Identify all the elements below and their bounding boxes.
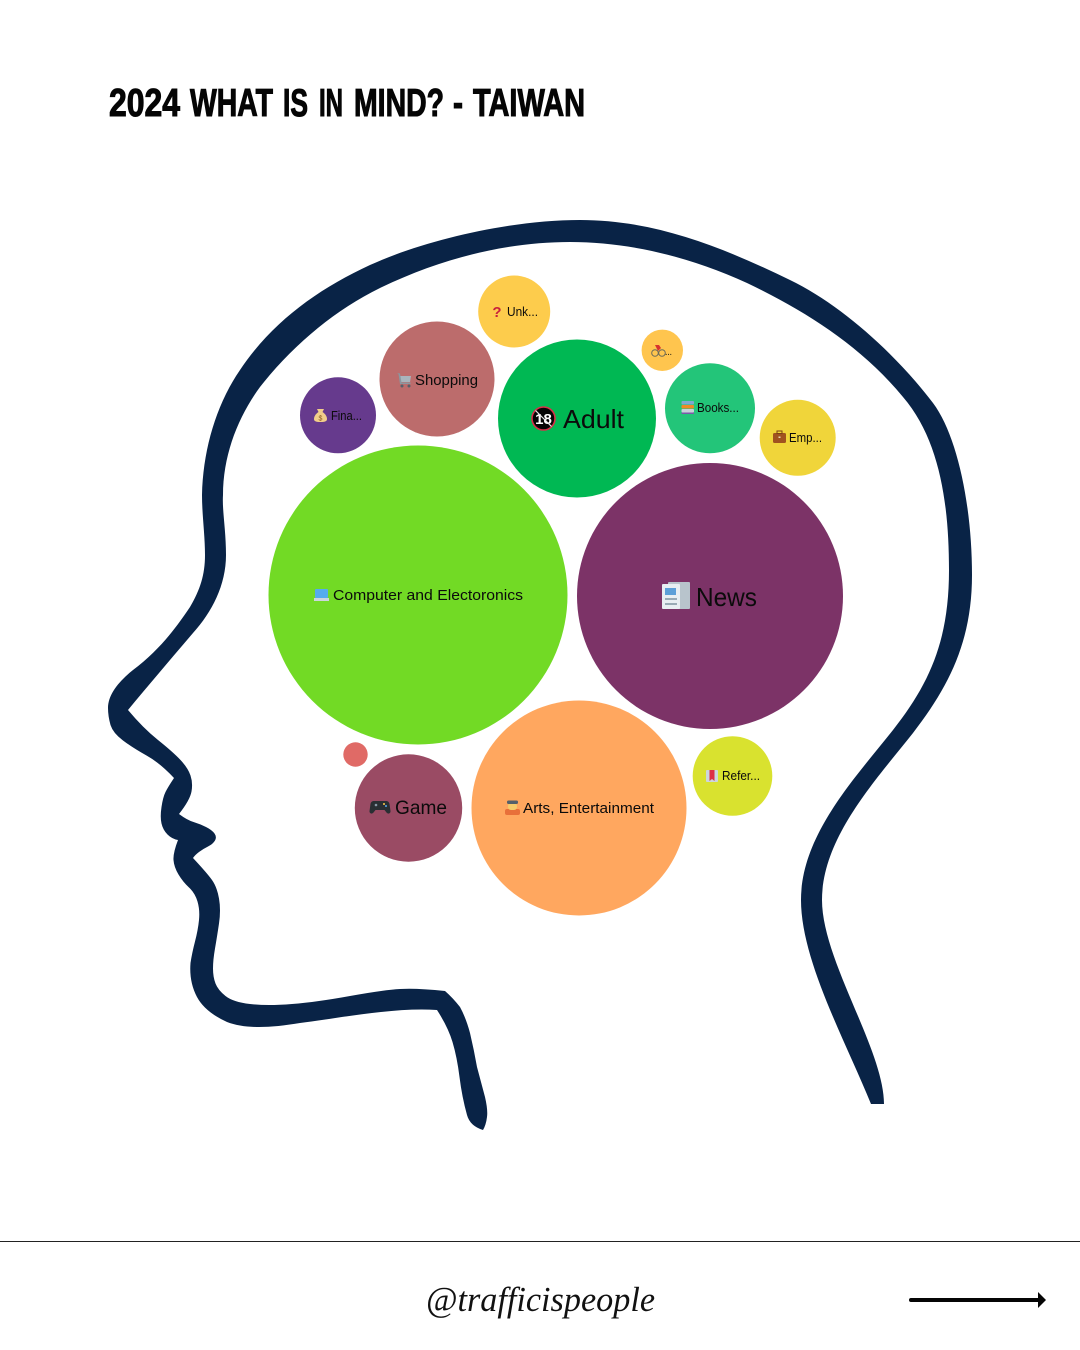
icon: game controller <box>369 801 391 814</box>
label: Reference: Refer... <box>722 769 760 783</box>
icon: cart <box>397 373 411 388</box>
head outline <box>108 220 972 1130</box>
bubble: News <box>577 463 843 729</box>
title: TAIWAN <box>473 82 585 125</box>
icon: no under 18 <box>532 407 555 430</box>
bubble: Books <box>665 363 755 453</box>
bubble: Shopping <box>380 322 494 436</box>
title: IN <box>319 82 343 125</box>
title: IS <box>283 82 308 125</box>
bubble: unlabeled small red <box>343 742 368 767</box>
bubble: Arts, Entertainment <box>472 700 686 916</box>
title: - <box>453 82 463 125</box>
label: Computer and Electronics: Computer and Electoronics <box>333 587 523 604</box>
title: MIND? <box>354 82 444 125</box>
label: Books: Books... <box>697 401 739 415</box>
icon: briefcase <box>773 431 786 443</box>
arrow <box>909 1292 1046 1308</box>
icon: question mark: ? <box>492 304 502 321</box>
icon: money bag: $ <box>319 416 323 422</box>
bubble: Finance <box>300 377 376 453</box>
label: Finance: Fina... <box>331 409 362 423</box>
bubble: Computer and Electronics <box>268 446 568 744</box>
label: Employment: Emp... <box>789 431 822 445</box>
icon: newspaper <box>662 582 690 609</box>
bubble: Reference <box>693 736 772 816</box>
label: ellipsis: ... <box>665 347 672 358</box>
bubble: Unknown <box>478 276 550 348</box>
bubble: Adult <box>498 340 656 498</box>
label: Arts, Entertainment: Arts, Entertainment <box>523 801 654 817</box>
label: News: News <box>696 582 757 612</box>
icon: books <box>682 401 694 414</box>
title: 2024 <box>109 82 180 125</box>
label: Game: Game <box>395 797 447 819</box>
bubble: Employment <box>760 400 836 476</box>
icon: artist <box>505 800 520 815</box>
label: Adult: Adult <box>563 404 625 434</box>
icon: laptop <box>314 589 329 601</box>
label: Unknown: Unk... <box>507 305 538 319</box>
title: WHAT <box>190 82 273 125</box>
bubble: Sports <box>642 330 683 371</box>
footer handle: @trafficispeople <box>426 1280 655 1319</box>
footer divider <box>0 1241 1080 1242</box>
icon: bookmark book <box>706 770 718 782</box>
icon: no under 18: 18 <box>535 411 552 428</box>
icon: cyclist <box>652 345 665 356</box>
label: Shopping: Shopping <box>415 373 478 389</box>
bubble: Game <box>355 754 462 862</box>
